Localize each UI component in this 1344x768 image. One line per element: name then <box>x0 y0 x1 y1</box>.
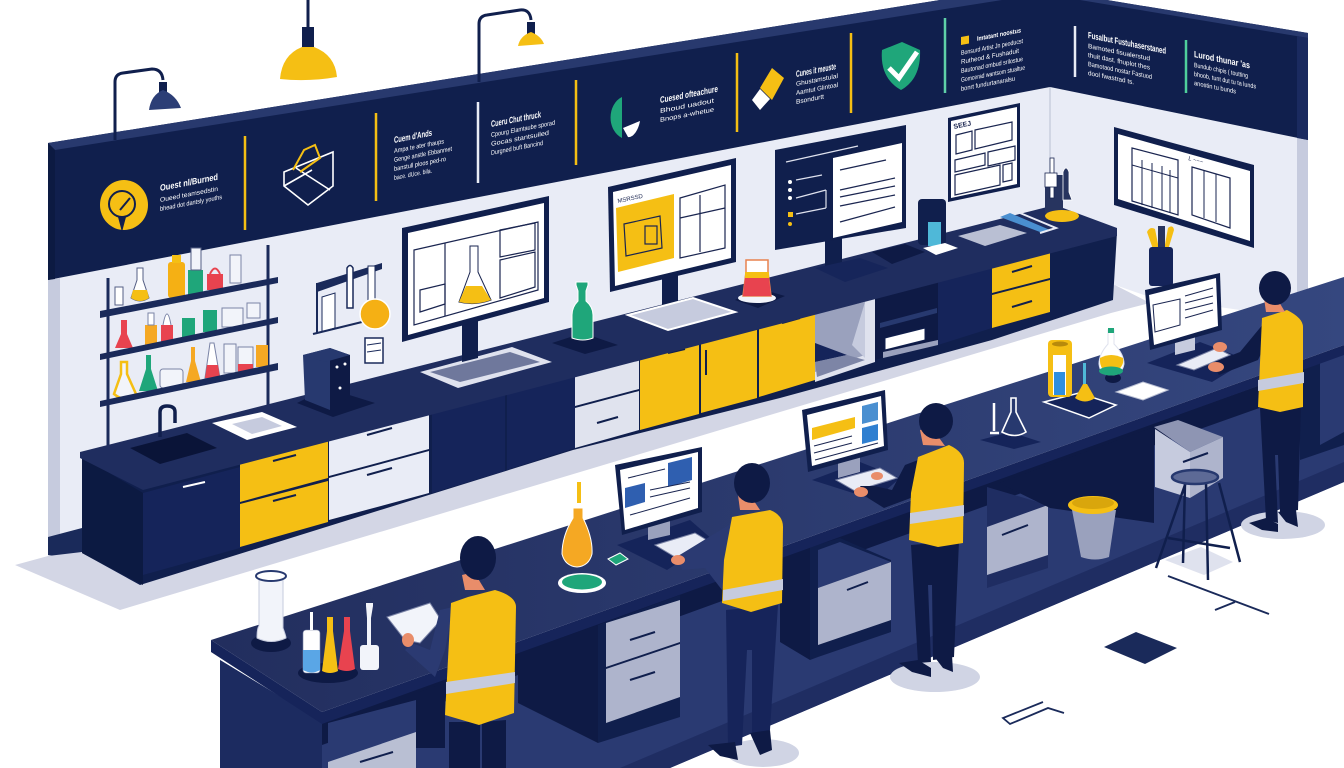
banner text 3: Durgned buft Bancind <box>491 140 543 157</box>
tubes group <box>298 603 379 683</box>
banner text 7: thuit dast. fhuplot thes <box>1088 52 1151 72</box>
monitor pad 3 front <box>1147 342 1248 382</box>
monitor pad 1 <box>617 520 713 570</box>
front counter left side <box>220 660 322 768</box>
monitor pad 2 front <box>812 462 900 500</box>
banner text 1: Ouest nl/Burned <box>160 172 218 193</box>
back counter left end <box>82 457 143 585</box>
banner text 8: anostin tu bunds <box>1194 80 1237 96</box>
green dish <box>558 573 606 593</box>
banner text 2: Genge anstle Ebbanmet <box>394 146 452 164</box>
icon: yellow gauge <box>100 180 148 232</box>
back counter cabinets <box>143 247 1050 575</box>
banner text 2: Ampa te ater thaups <box>394 138 445 155</box>
glass jar <box>251 571 291 652</box>
paper <box>1116 382 1168 400</box>
wall apparatus with flask <box>313 263 390 363</box>
banner text 4 <box>660 84 718 124</box>
floor marks <box>1003 576 1269 724</box>
cylinder yellow and blue <box>1048 340 1072 397</box>
banner text 5: Cunes it meuste <box>796 61 836 79</box>
banner text 5 <box>796 61 839 106</box>
banner: left wing <box>48 0 1308 280</box>
green bottle <box>552 282 618 354</box>
bottom row bottles <box>114 343 268 399</box>
icon: yellow and white tiles <box>752 68 784 110</box>
person 4 <box>1208 271 1325 539</box>
front counter base <box>220 355 1344 768</box>
wall board: SEEJ <box>953 120 972 131</box>
back wall <box>48 87 1308 558</box>
banner text 6: Gomcerad wantsom stualtue <box>961 65 1025 84</box>
front counter edge <box>211 345 1344 724</box>
banner text 4: Cuesed ofteachure <box>660 84 718 105</box>
flasks on counter <box>1075 328 1124 402</box>
front counter plinth <box>620 462 1344 768</box>
front counter top <box>211 277 1344 712</box>
icon: pie chart <box>611 97 640 138</box>
banner text 7: dool fwastrad ts. <box>1088 70 1134 86</box>
banner text 1: bhead dot dantsly youths <box>160 194 223 213</box>
banner text 4: Bnops a-whetue <box>660 106 714 124</box>
banner text 7 <box>1088 30 1166 93</box>
top row bottles <box>115 248 241 305</box>
person 3 <box>854 403 980 692</box>
banner text 5: Bsondurtt <box>796 94 824 106</box>
keyboard front 1 <box>655 533 715 557</box>
monitor pad 2 <box>628 298 735 330</box>
keyboard front 2 <box>836 468 897 491</box>
banner text 6: Rutheod & Fushaduit <box>961 48 1019 66</box>
shelving with bottles <box>100 245 278 447</box>
banner text 3: Cueru Chut thruck <box>491 109 542 129</box>
stool <box>1156 470 1240 580</box>
tray <box>958 225 1027 246</box>
banner text 8: Bundub chipis ( toutting <box>1194 62 1248 80</box>
small green tag <box>608 553 628 565</box>
banner text 3: Cpourg Elamtaube sporad <box>491 120 555 139</box>
banner text 1: Oueed teamsedstin <box>160 186 218 204</box>
drawer handles <box>183 266 1032 501</box>
banner text 2: banstull ploos ped-ro <box>394 156 446 173</box>
banner text 7: Bamoted fisualerstud <box>1088 43 1150 63</box>
trash bin <box>1068 496 1118 560</box>
right wall board: L ~~~ <box>1187 156 1204 166</box>
banner text 6: bonrt fundurtanaralsu <box>961 75 1015 93</box>
back counter top <box>80 205 1117 490</box>
machine box <box>297 348 375 417</box>
keyboard dark <box>872 244 925 264</box>
wall board <box>948 103 1020 202</box>
banner text 8 <box>1194 49 1257 100</box>
lamp: right <box>479 10 544 82</box>
banner text 8: bhoob, tunt dut tu ta lunds <box>1194 71 1257 91</box>
dark box with glass <box>918 199 958 255</box>
center sink <box>420 347 552 388</box>
lamp: center pendant <box>280 0 337 80</box>
keyboard front 3 <box>1177 348 1230 370</box>
banner text 6: Bonsurd Artist Jn peoducst <box>961 38 1023 57</box>
tray front <box>1044 393 1116 418</box>
jar with red liquid <box>735 260 785 308</box>
icon: green shield with check <box>882 42 920 90</box>
flask orange <box>562 482 592 567</box>
paper pad <box>212 412 297 440</box>
blue instruments <box>1000 213 1056 233</box>
right wall board <box>1114 127 1254 248</box>
sink left <box>130 406 217 464</box>
under-counter shadow <box>322 355 1344 745</box>
outline flasks <box>980 398 1041 449</box>
lab stand <box>1045 158 1079 222</box>
banner text 5: Aamtut Glintoal <box>796 82 839 97</box>
banner text 6 <box>961 25 1025 93</box>
banner text 8: Lurod thunar 'as <box>1194 49 1250 70</box>
banner text 7: Fusalbut Fustuhaserstaned <box>1088 30 1166 56</box>
banner text 1 <box>160 171 223 213</box>
banner text 2 <box>394 124 452 182</box>
banner: right wing <box>1080 0 1308 140</box>
banner dividers <box>245 18 1186 230</box>
banner text 3: Gocas stantsuiled <box>491 130 549 148</box>
back counter front face <box>82 232 1117 585</box>
banner text 3 <box>491 107 555 157</box>
banner text 2: bace. dUce. bila. <box>394 168 432 182</box>
middle row bottles <box>115 303 260 348</box>
banner text 5: Ghustamstulal <box>796 73 839 88</box>
monitor 1 <box>402 196 549 362</box>
monitor 2 <box>608 158 736 307</box>
banner text 4: Bhoud uadout <box>660 98 714 115</box>
monitor front 3 <box>1145 273 1222 355</box>
banner text 7: Bamotaod nostar Fastuod <box>1088 61 1152 81</box>
banner text 2: Cuem d'Ands <box>394 128 432 145</box>
monitor 3 <box>775 125 906 282</box>
icon: shield outline <box>284 145 333 205</box>
banner text 6: Imtatant noostus <box>977 27 1021 43</box>
pen cup <box>1147 226 1174 286</box>
person 2 <box>671 463 799 767</box>
lamp: left <box>115 69 181 140</box>
floor shadow under back counter <box>15 285 1150 610</box>
stool shadow <box>1165 547 1233 575</box>
monitor front 1 <box>615 447 702 540</box>
person 1 <box>387 536 516 768</box>
banner text 6: Bautonad ombud srilostue <box>961 56 1023 75</box>
monitor front 2 <box>802 390 888 478</box>
monitor 2: MSRSSD <box>617 194 644 205</box>
front counter cabinets <box>328 354 1344 768</box>
